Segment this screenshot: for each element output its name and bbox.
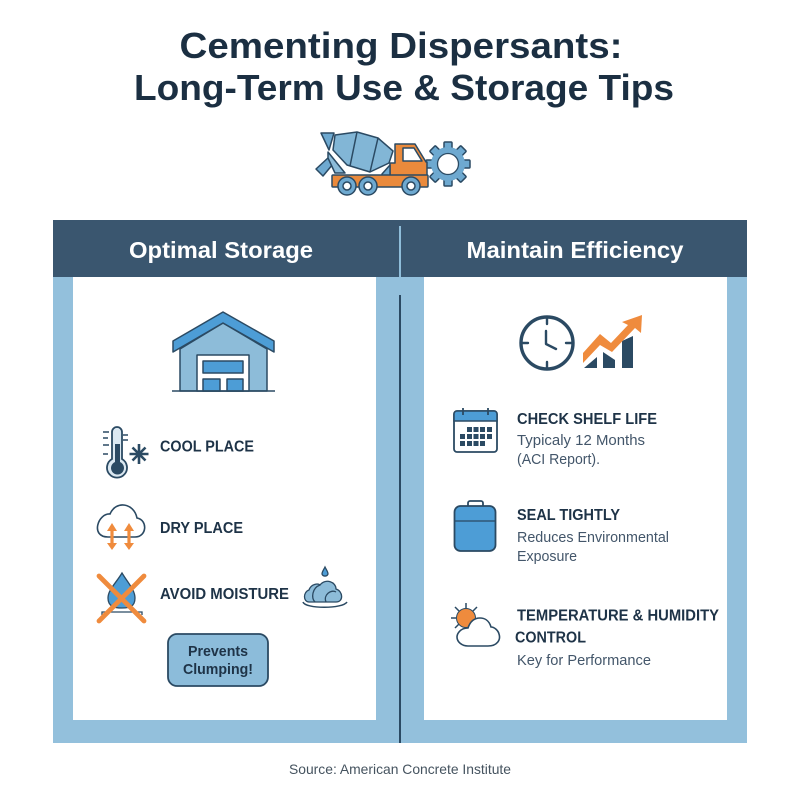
heading: optimal storage: Optimal Storage (129, 237, 313, 263)
source line: Source: American Concrete Institute (289, 762, 511, 777)
drum (333, 132, 393, 172)
header divider (399, 226, 401, 277)
icon: crossed-out water drop (99, 573, 144, 621)
callout: prevents clumping: Prevents (188, 643, 248, 660)
title (134, 25, 674, 108)
heading: maintain efficiency: Maintain Efficiency (466, 237, 684, 263)
text: seal tightly (517, 507, 669, 565)
gear (426, 142, 470, 186)
icon: warehouse (172, 312, 275, 391)
icon: cement mixer truck with gear (316, 132, 470, 195)
header bar (53, 220, 747, 277)
text: seal tightly: SEAL TIGHTLY (517, 507, 620, 524)
text: check shelf life (517, 411, 657, 468)
text: check shelf life: Typicaly 12 Months (517, 432, 645, 449)
center divider line (399, 295, 401, 743)
wheels (338, 177, 420, 195)
text: check shelf life: CHECK SHELF LIFE (517, 411, 657, 428)
panel frame (53, 220, 747, 743)
title: Cementing Dispersants: (180, 25, 622, 66)
title: Long-Term Use & Storage Tips (134, 67, 674, 108)
icon: calendar (454, 408, 497, 452)
icon: clock (521, 317, 573, 369)
label: avoid moisture: AVOID MOISTURE (160, 586, 289, 603)
text: seal tightly: Reduces Environmental (517, 529, 669, 546)
icon: sealed container (454, 501, 496, 551)
text: temperature and humidity control: CONTROL (515, 630, 586, 646)
icon: clumped powder with droplet (303, 567, 347, 607)
text: temperature and humidity control: Key for Performance (517, 652, 651, 669)
callout: prevents clumping: Clumping! (183, 661, 253, 678)
callout: prevents clumping (168, 634, 268, 686)
panel: optimal storage (73, 277, 376, 720)
text: seal tightly: Exposure (517, 548, 577, 565)
icon: thermometer with snowflake (103, 427, 148, 478)
text: temperature and humidity control (515, 608, 719, 669)
cab (390, 144, 427, 176)
text: check shelf life: (ACI Report). (517, 451, 600, 468)
label: cool place: COOL PLACE (160, 438, 254, 456)
label: dry place: DRY PLACE (160, 520, 243, 537)
icon: cloud with arrows (97, 505, 145, 550)
panel: maintain efficiency (424, 277, 727, 720)
icon: growth chart with arrow (583, 315, 642, 368)
chassis (332, 175, 428, 187)
hopper and chute (321, 133, 334, 150)
icon: sun and cloud (451, 603, 500, 646)
text: temperature and humidity control: TEMPERATURE & HUMIDITY (517, 608, 719, 624)
